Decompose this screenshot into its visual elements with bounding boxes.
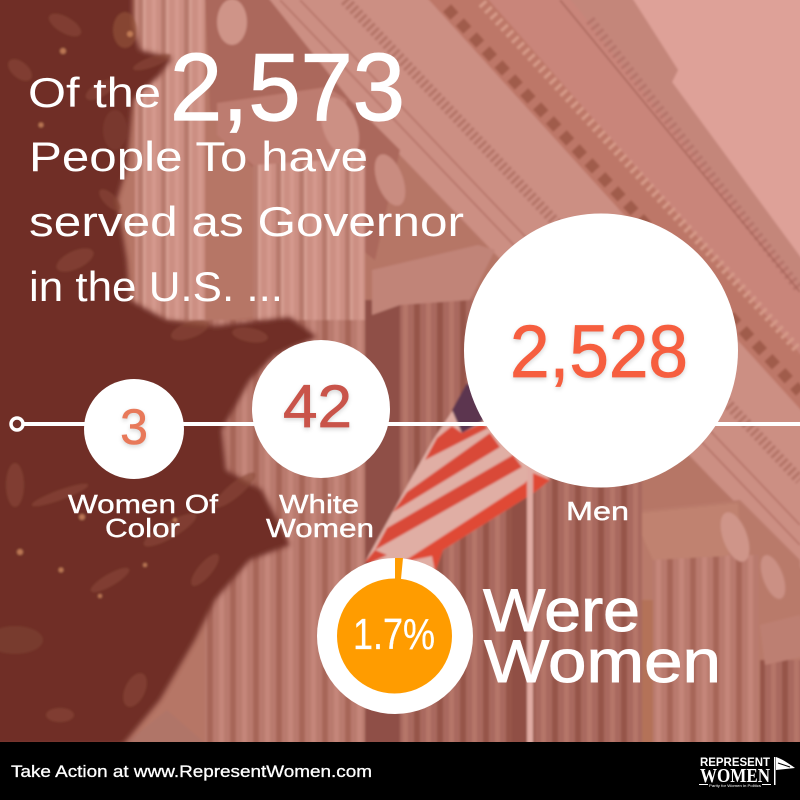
timeline line [11,418,800,430]
callout: were women: Women [484,628,721,695]
label: white women: White [279,489,359,519]
bubble: men [464,214,738,526]
bubble: white women [252,340,390,543]
capitals [217,0,800,665]
logo: RepresentWomen: Parity for Women in Politics [709,783,761,788]
timeline start marker [11,418,23,430]
title block: in the U.S. ... [29,263,283,310]
flag [365,383,550,745]
title block: Of the [28,69,161,116]
label: white women: Women [266,513,374,543]
label: men: Men [566,496,629,526]
roof cornice [420,0,800,430]
bubble: men: 2,528 [510,310,688,393]
soffit [205,0,400,260]
tree foliage [0,0,317,745]
light building wedge [123,710,207,745]
footer bar [0,742,800,800]
bubble: women of color: 3 [120,399,148,455]
headline number: 2,573 [170,34,405,141]
logo: RepresentWomen [699,755,795,788]
label: women of color: Color [105,513,180,543]
label: women of color: Women Of [68,489,219,519]
entablature [205,0,800,742]
title block: People To have [29,133,368,180]
foliage highlights [17,31,177,598]
donut: 1.7 percent: 1.7% [353,610,435,659]
bubble: white women: 42 [283,373,352,440]
call to action: Take Action at www.RepresentWomen.com [11,762,372,781]
label: women of color [68,489,219,543]
logo: RepresentWomen: REPRESENT [700,755,771,769]
column shafts [135,0,800,745]
title block: served as Governor [29,198,464,245]
callout: were women: Were [483,577,640,644]
callout: were women [483,577,721,695]
label: white women [266,489,374,543]
title block [28,34,464,310]
donut: 1.7 percent [317,558,473,714]
logo: RepresentWomen: WOMEN [700,765,770,787]
bubble: women of color [68,379,219,543]
sky [627,0,800,270]
